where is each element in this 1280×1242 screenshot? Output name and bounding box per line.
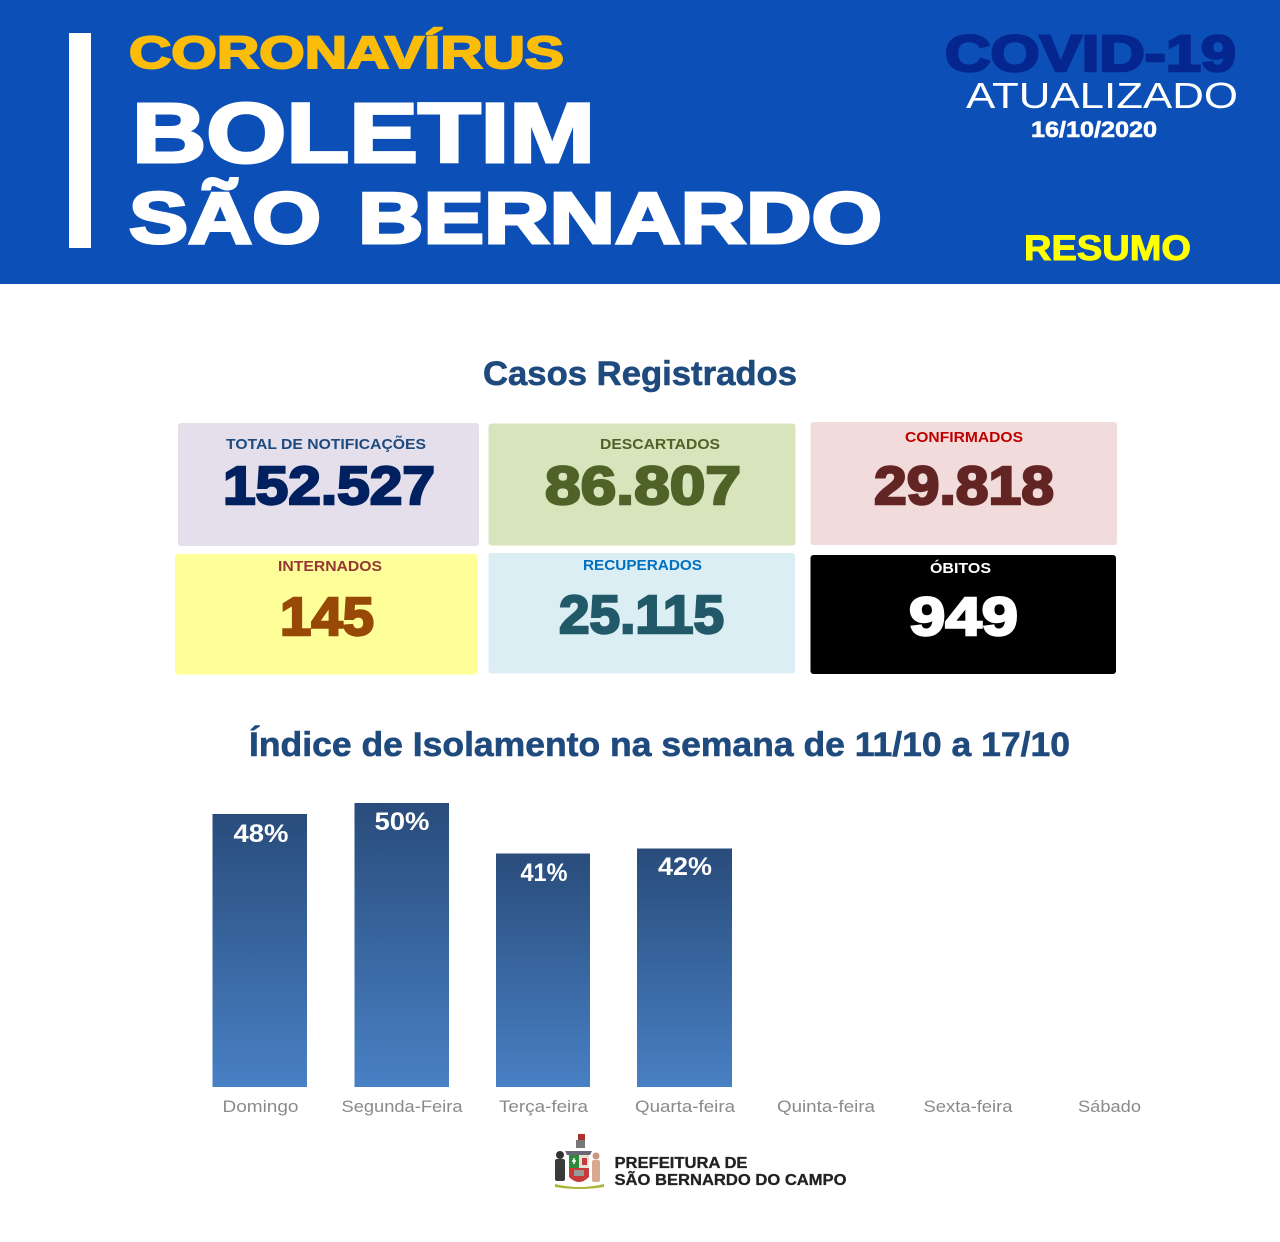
axis labels: Quarta-feira: [635, 1097, 736, 1116]
card: recuperados: 25.115: [559, 585, 724, 645]
card: total de notificações: TOTAL DE NOTIFICAÇÕES: [226, 435, 426, 453]
axis labels: Quinta-feira: [777, 1097, 876, 1116]
axis labels: Sexta-feira: [924, 1097, 1013, 1116]
axis labels: Segunda-Feira: [342, 1097, 463, 1116]
header vertical bar: [69, 33, 91, 248]
resumo label: RESUMO: [1024, 229, 1191, 268]
card: óbitos: [810, 555, 1116, 674]
heading: são bernardo: BERNARDO: [358, 179, 882, 259]
header banner: [0, 0, 1280, 284]
card: recuperados: [488, 553, 795, 674]
card: confirmados: [810, 422, 1117, 545]
card: confirmados: 29.818: [874, 456, 1054, 516]
footer logo: prefeitura: SÃO BERNARDO DO CAMPO: [614, 1171, 846, 1189]
card: total de notificações: 152.527: [223, 456, 435, 516]
heading: boletim: BOLETIM: [132, 86, 595, 180]
bar: segunda 50%: [354, 803, 449, 1087]
bar: quarta 42%: [637, 848, 732, 1087]
axis labels: [222, 1097, 1141, 1116]
badge: atualizado: ATUALIZADO: [966, 75, 1238, 116]
heading: coronavírus: CORONAVÍRUS: [129, 27, 564, 78]
bar: segunda 50%: 50%: [374, 808, 430, 836]
bar chart: isolamento: [212, 803, 1141, 1116]
axis labels: Sábado: [1078, 1097, 1141, 1116]
bar: terça 41%: [496, 854, 590, 1087]
card: confirmados: CONFIRMADOS: [905, 429, 1023, 446]
logo text: PREFEITURA DE: [614, 1155, 748, 1172]
card: óbitos: ÓBITOS: [930, 559, 991, 577]
axis labels: Terça-feira: [499, 1097, 589, 1116]
heading: são bernardo: [129, 178, 882, 259]
heading: índice de isolamento: Índice de Isolamento na semana de 11/10 a 17/10: [249, 726, 1070, 764]
badge: covid-19: COVID-19: [945, 25, 1236, 82]
card: internados: [175, 554, 478, 674]
icon: coat of arms: [555, 1134, 604, 1189]
card: internados: INTERNADOS: [278, 558, 382, 575]
date: 16/10/2020: [1031, 117, 1157, 142]
card: recuperados: RECUPERADOS: [583, 557, 702, 574]
heading: casos registrados: Casos Registrados: [483, 355, 797, 393]
card: total de notificações: [178, 423, 479, 546]
axis labels: Domingo: [222, 1097, 298, 1116]
bar: terça 41%: 41%: [520, 859, 568, 887]
card: óbitos: 949: [909, 587, 1018, 647]
card: internados: 145: [280, 587, 374, 647]
bar: domingo 48%: [212, 814, 307, 1087]
bar: quarta 42%: 42%: [658, 853, 712, 881]
bar: domingo 48%: 48%: [234, 820, 288, 848]
card: descartados: DESCARTADOS: [600, 436, 720, 453]
heading: são bernardo: SÃO: [129, 178, 321, 259]
card: descartados: [488, 424, 796, 546]
footer logo: prefeitura: [555, 1134, 846, 1189]
card: descartados: 86.807: [545, 456, 741, 516]
